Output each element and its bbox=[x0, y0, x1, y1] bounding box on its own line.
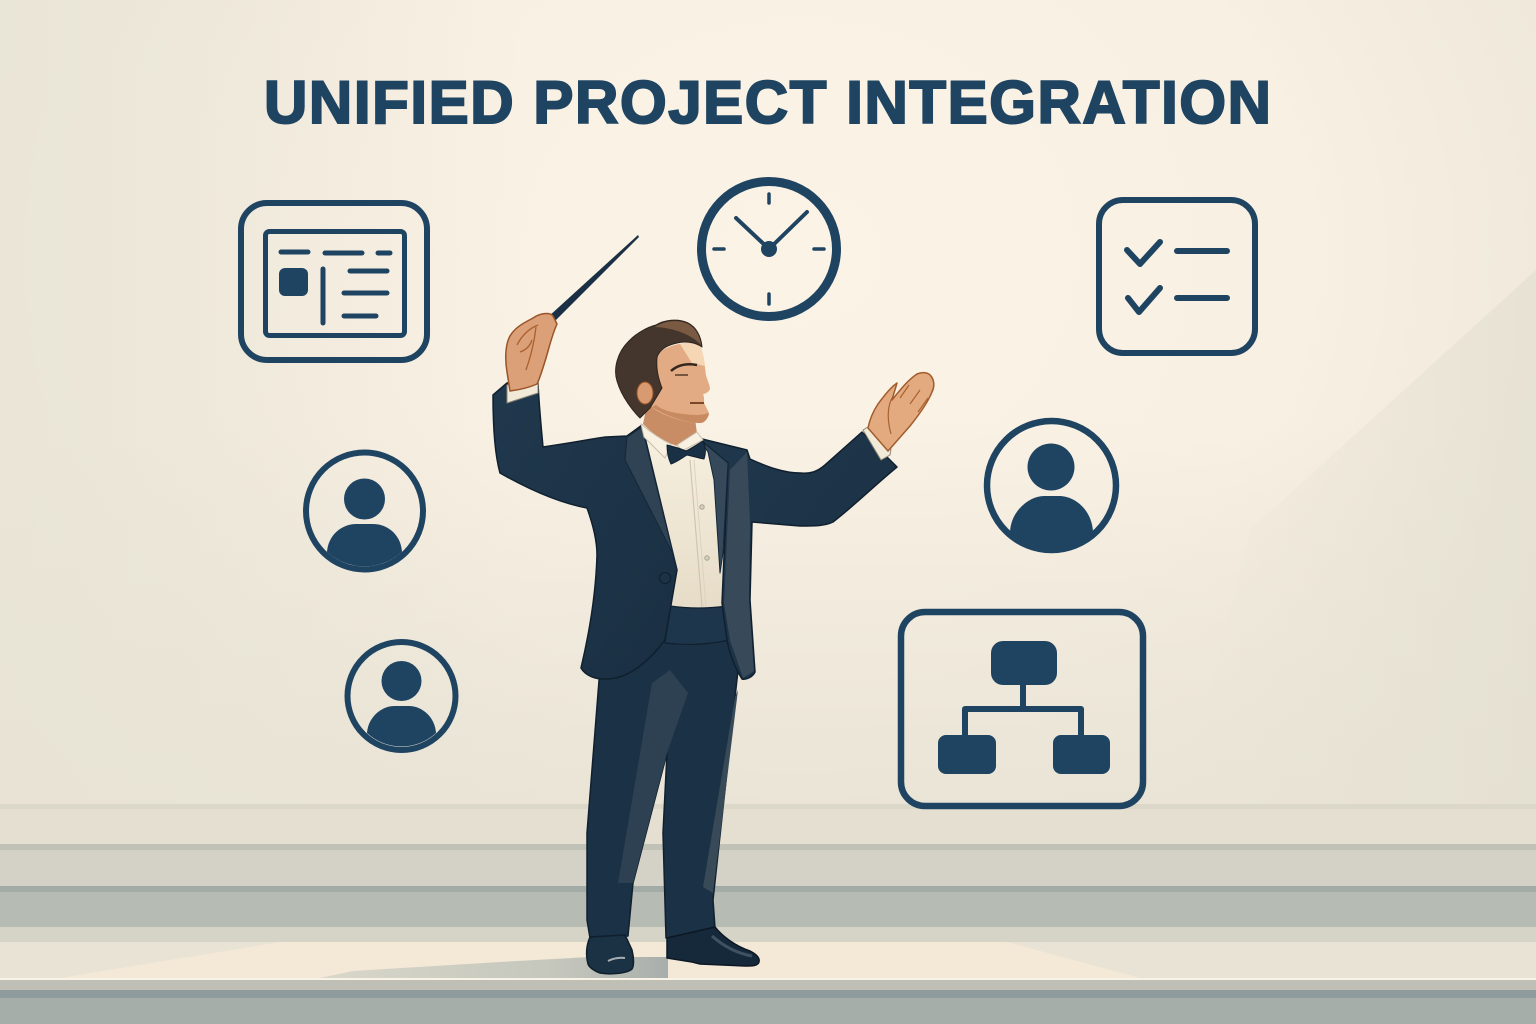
foot shadow bbox=[320, 957, 668, 978]
jacket right side and open arm bbox=[698, 432, 897, 679]
conductor figure bbox=[493, 235, 934, 974]
right shoe bbox=[667, 927, 759, 966]
left shoe bbox=[587, 935, 634, 974]
collar bbox=[641, 424, 703, 458]
shirt bbox=[642, 425, 728, 607]
icon: person left lower bbox=[348, 642, 456, 750]
icon: checklist bbox=[1099, 200, 1255, 353]
eyebrow, eye, mouth bbox=[671, 364, 697, 371]
face bbox=[648, 343, 710, 423]
neck bbox=[643, 400, 697, 447]
icon: person right bbox=[987, 421, 1116, 550]
title: UNIFIED PROJECT INTEGRATION bbox=[264, 69, 1271, 136]
stage floor bands bbox=[0, 804, 1536, 1024]
left lapel bbox=[625, 427, 677, 570]
raised hand with cuff bbox=[506, 314, 557, 403]
shirt studs bbox=[700, 505, 709, 560]
head bbox=[616, 320, 710, 458]
icon: project board bbox=[241, 203, 427, 360]
hair bbox=[616, 320, 702, 418]
icon: clock bbox=[702, 182, 836, 316]
trousers bbox=[587, 636, 738, 938]
cummerbund bbox=[665, 606, 730, 644]
open hand with cuff bbox=[863, 373, 934, 460]
baton bbox=[538, 235, 639, 332]
ear bbox=[637, 382, 653, 404]
bow tie bbox=[667, 441, 705, 464]
icon: person left upper bbox=[306, 452, 423, 570]
background wall bbox=[0, 0, 1536, 806]
right lapel bbox=[698, 438, 728, 573]
icon: org chart bbox=[901, 612, 1143, 806]
jacket button bbox=[660, 572, 670, 584]
jacket left side and raised arm bbox=[493, 383, 677, 679]
lit stage floor bbox=[60, 942, 1140, 978]
